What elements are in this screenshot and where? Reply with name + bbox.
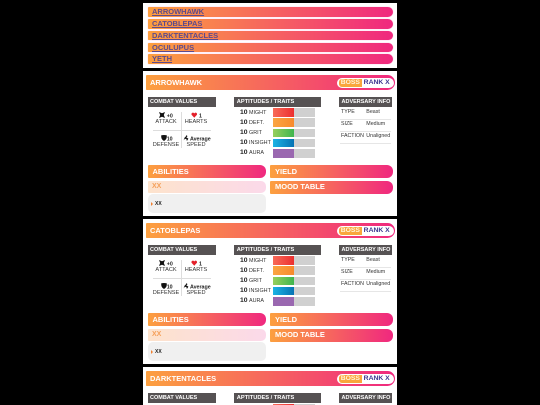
stat: hearts: HEARTS <box>185 266 207 272</box>
aptitude labels: MIGHT <box>249 258 266 264</box>
aptitude labels: 10 <box>240 109 248 116</box>
heading: aptitudes and traits: APTITUDES / TRAITS <box>237 99 294 105</box>
aptitude bars <box>273 256 315 306</box>
aptitude labels: 10 <box>240 129 248 136</box>
heading: aptitudes and traits: APTITUDES / TRAITS <box>237 247 294 253</box>
aptitude labels: MIGHT <box>249 110 266 116</box>
aptitude labels: DEFT. <box>249 120 264 126</box>
badge: boss rank: BOSS <box>341 227 360 234</box>
adversary info table: Medium <box>366 269 385 275</box>
link: Yeth <box>148 54 392 64</box>
stat: defense: 10 <box>167 284 173 290</box>
heading: yield <box>270 165 392 178</box>
adversary info table: Medium <box>366 121 385 127</box>
ability description box <box>148 342 266 360</box>
ability name bar: XX <box>152 183 161 190</box>
aptitude bar: might <box>273 404 315 405</box>
panel: Arrowhawk stat block <box>143 71 397 216</box>
heading: combat values <box>148 245 216 255</box>
header: Catoblepas: CATOBLEPAS <box>150 226 200 235</box>
heading: combat values: COMBAT VALUES <box>150 247 197 253</box>
adversary info table <box>340 109 391 144</box>
adversary info table: TYPE <box>341 109 355 115</box>
adversary info table: FACTION <box>341 133 364 139</box>
heading: adversary info <box>339 97 392 107</box>
header: Catoblepas <box>146 223 394 238</box>
stat: attack <box>155 260 177 272</box>
stat: hearts: 1 <box>199 262 202 268</box>
badge: boss rank <box>337 78 394 88</box>
heading: adversary info <box>339 393 392 403</box>
link: Arrowhawk: ARROWHAWK <box>152 7 204 16</box>
stat: speed: Average <box>190 284 211 290</box>
heading: adversary info <box>339 245 392 255</box>
heading: combat values <box>148 393 216 403</box>
aptitude labels: GRIT <box>249 278 262 284</box>
panel: Catoblepas stat block <box>143 219 397 364</box>
badge: boss rank <box>337 374 394 384</box>
adversary info table: Beast <box>366 109 380 115</box>
adversary info table: Unaligned <box>366 281 390 287</box>
ability description box <box>148 194 266 212</box>
ability name bar <box>148 328 266 340</box>
panel: creature index <box>143 3 397 68</box>
adversary info table: FACTION <box>341 281 364 287</box>
stat: defense <box>153 283 179 296</box>
adversary info table: TYPE <box>341 257 355 263</box>
stat: speed <box>184 283 211 296</box>
stat: attack <box>155 112 177 124</box>
adversary info table: Beast <box>366 257 380 263</box>
badge: boss rank: RANK X <box>364 227 390 234</box>
link: Oculupus: OCULUPUS <box>152 43 194 52</box>
ability name bar <box>148 180 266 192</box>
stat: attack: ATTACK <box>155 118 177 124</box>
heading: abilities: ABILITIES <box>152 167 189 176</box>
link: Catoblepas: CATOBLEPAS <box>152 19 202 28</box>
aptitude bars <box>273 108 315 158</box>
stat: speed: Average <box>190 136 211 142</box>
aptitude labels: INSIGHT <box>249 140 271 146</box>
ability description box: XX <box>155 201 162 207</box>
heading: aptitudes and traits <box>234 97 321 107</box>
badge: boss rank: RANK X <box>364 375 390 382</box>
stat: speed: SPEED <box>187 290 205 296</box>
badge: boss rank: RANK X <box>364 79 390 86</box>
heading: aptitudes and traits: APTITUDES / TRAITS <box>237 395 294 401</box>
adversary info table: SIZE <box>341 269 353 275</box>
heading: adversary info: ADVERSARY INFO <box>342 247 390 253</box>
stat: hearts: HEARTS <box>185 118 207 124</box>
aptitude labels <box>240 109 271 156</box>
badge: boss rank <box>337 226 394 236</box>
badge: boss rank: BOSS <box>341 79 360 86</box>
heading: adversary info: ADVERSARY INFO <box>342 395 390 401</box>
heading: combat values: COMBAT VALUES <box>150 99 197 105</box>
stat: hearts <box>185 260 207 272</box>
stat: defense: 10 <box>167 136 173 142</box>
stat: attack: ATTACK <box>155 266 177 272</box>
aptitude labels: AURA <box>249 298 264 304</box>
stat: defense: DEFENSE <box>153 142 179 148</box>
aptitude labels <box>240 257 271 304</box>
aptitude labels: 10 <box>240 139 248 146</box>
aptitude labels: DEFT. <box>249 268 264 274</box>
link: Arrowhawk <box>148 7 392 17</box>
combat values grid <box>153 260 211 296</box>
aptitude labels: 10 <box>240 149 248 156</box>
header: Darktentacles: DARKTENTACLES <box>150 374 216 383</box>
adversary info table: SIZE <box>341 121 353 127</box>
heading: mood table: MOOD TABLE <box>275 182 325 191</box>
heading: mood table: MOOD TABLE <box>275 330 325 339</box>
header: Arrowhawk <box>146 75 394 90</box>
link: Catoblepas <box>148 19 392 29</box>
aptitude labels: AURA <box>249 150 264 156</box>
stat: attack: +0 <box>167 262 173 268</box>
stat: defense <box>153 135 179 148</box>
stat: hearts: 1 <box>199 114 202 120</box>
heading: combat values <box>148 97 216 107</box>
stat: speed <box>184 135 211 148</box>
heading: abilities <box>148 165 266 178</box>
link: Yeth: YETH <box>152 54 172 63</box>
heading: yield <box>270 313 392 326</box>
aptitude labels: INSIGHT <box>249 288 271 294</box>
aptitude labels: GRIT <box>249 130 262 136</box>
aptitude labels: 10 <box>240 297 248 304</box>
aptitude labels: 10 <box>240 267 248 274</box>
header: Arrowhawk: ARROWHAWK <box>150 78 202 87</box>
link: Oculupus <box>148 43 392 52</box>
heading: combat values: COMBAT VALUES <box>150 395 197 401</box>
ability name bar: XX <box>152 331 161 338</box>
heading: adversary info: ADVERSARY INFO <box>342 99 390 105</box>
heading: abilities <box>148 313 266 326</box>
link: Darktentacles <box>148 31 392 40</box>
stat: hearts <box>185 112 207 124</box>
heading: mood table <box>270 180 392 194</box>
heading: abilities: ABILITIES <box>152 315 189 324</box>
adversary info table: Unaligned <box>366 133 390 139</box>
panel: Darktentacles stat block <box>143 367 397 405</box>
stat: defense: DEFENSE <box>153 290 179 296</box>
combat values grid <box>153 112 211 148</box>
ability description box: XX <box>155 349 162 355</box>
badge: boss rank: BOSS <box>341 375 360 382</box>
aptitude labels: 10 <box>240 257 248 264</box>
aptitude labels: 10 <box>240 119 248 126</box>
heading: yield: YIELD <box>275 315 297 324</box>
aptitude labels: 10 <box>240 287 248 294</box>
link: Darktentacles: DARKTENTACLES <box>152 31 218 40</box>
adversary info table <box>340 257 391 292</box>
heading: yield: YIELD <box>275 167 297 176</box>
heading: aptitudes and traits <box>234 393 321 403</box>
header: Darktentacles <box>146 371 394 386</box>
stat: speed: SPEED <box>187 142 205 148</box>
aptitude labels: 10 <box>240 277 248 284</box>
heading: aptitudes and traits <box>234 245 321 255</box>
stat: attack: +0 <box>167 114 173 120</box>
heading: mood table <box>270 328 392 342</box>
